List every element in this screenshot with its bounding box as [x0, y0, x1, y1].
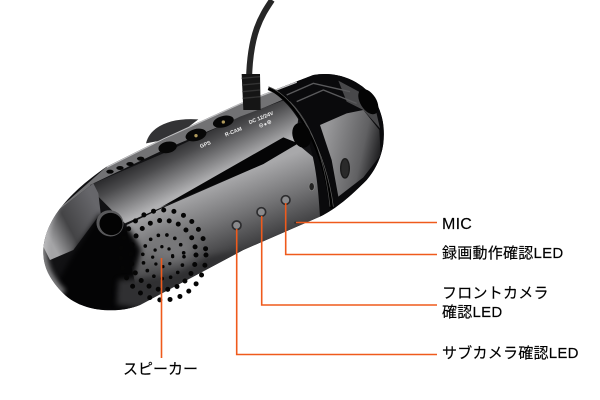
device drawing in zoomed coordinates [43, 74, 384, 310]
label: front camera LED: 確認LED [442, 304, 502, 321]
port labels: DC 12/24V [248, 111, 275, 126]
leader lines [162, 203, 437, 358]
port labels: ⊖●⊕ [258, 118, 273, 130]
label: recording LED: 録画動作確認LED [442, 245, 563, 262]
side holes [289, 86, 383, 224]
photo: camera device [30, 0, 390, 320]
label: speaker: スピーカー [123, 361, 198, 378]
speaker grille [121, 210, 206, 300]
capsule body [43, 74, 384, 310]
strain relief [242, 74, 261, 110]
port labels [199, 111, 275, 150]
LED indicators [232, 196, 290, 230]
label: front camera LED: フロントカメラ [442, 285, 549, 302]
groove rings [268, 87, 333, 208]
rear lens bump [146, 119, 198, 143]
port labels: GPS [199, 140, 212, 150]
label: front camera LED [442, 285, 549, 321]
port labels: R-CAM [224, 126, 243, 139]
power cable [249, 0, 272, 80]
label: MIC: MIC [442, 216, 472, 233]
front lens hole [92, 206, 128, 241]
top ports [106, 113, 235, 174]
label: sub camera LED: サブカメラ確認LED [442, 344, 579, 362]
